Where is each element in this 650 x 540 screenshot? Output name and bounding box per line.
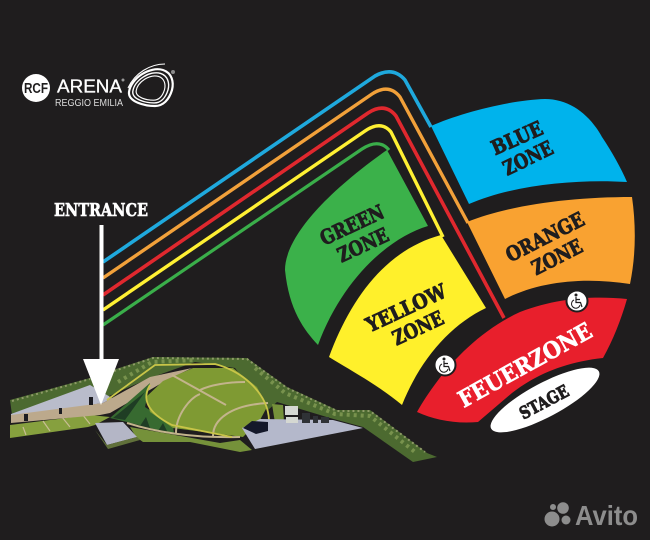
stage: STAGE bbox=[516, 382, 573, 424]
watermark: Avito bbox=[544, 500, 638, 531]
panel: orange zone: ORANGE bbox=[502, 207, 588, 267]
panel: yellow zone: ZONE bbox=[388, 306, 448, 350]
panel: yellow zone bbox=[329, 235, 486, 405]
logo: RCF Arena Reggio Emilia: ARENA bbox=[57, 76, 122, 96]
coloured route lines to zones bbox=[103, 72, 504, 325]
amphitheatre lawn bbox=[146, 368, 267, 437]
icon: wheelchair access right bbox=[566, 290, 588, 312]
icon: wheelchair access left bbox=[434, 354, 456, 376]
stage bbox=[483, 356, 607, 444]
panel: orange zone bbox=[467, 197, 635, 299]
panel: feuerzone: FEUERZONE bbox=[454, 318, 597, 413]
heading: entrance: ENTRANCE bbox=[54, 201, 148, 221]
left car park bbox=[11, 385, 112, 417]
aerial view of the arena site bbox=[10, 357, 437, 462]
amphitheatre paths bbox=[127, 375, 268, 437]
logo: RCF Arena Reggio Emilia: RCF bbox=[24, 81, 48, 97]
amphitheatre yellow rim bbox=[107, 364, 269, 420]
parked vehicles bbox=[24, 397, 93, 421]
watermark: Avito: Avito bbox=[575, 500, 638, 531]
panel: blue zone: ZONE bbox=[499, 136, 557, 180]
panel: blue zone: BLUE bbox=[487, 116, 547, 160]
entrance path bbox=[11, 368, 192, 423]
panel: green zone bbox=[285, 150, 428, 345]
bottom grass strip bbox=[10, 415, 110, 438]
lower car park bbox=[95, 422, 137, 445]
logo: RCF Arena Reggio Emilia: REGGIO EMILIA bbox=[55, 98, 123, 109]
panel: blue zone bbox=[431, 99, 627, 204]
panel: orange zone: ZONE bbox=[527, 234, 587, 280]
panel: green zone: GREEN bbox=[316, 200, 388, 250]
right car park bbox=[242, 419, 363, 449]
panel: feuerzone bbox=[417, 298, 627, 423]
arrow: entrance bbox=[83, 225, 119, 405]
small lawn bbox=[272, 404, 284, 423]
service buildings bbox=[285, 406, 298, 423]
panel: green zone: ZONE bbox=[333, 223, 393, 267]
lower lawn bbox=[130, 427, 252, 452]
logo: RCF Arena Reggio Emilia bbox=[22, 64, 175, 109]
stage structure bbox=[243, 421, 268, 434]
trees bbox=[10, 357, 437, 462]
dark slope bbox=[110, 383, 174, 434]
panel: yellow zone: YELLOW bbox=[361, 279, 450, 337]
